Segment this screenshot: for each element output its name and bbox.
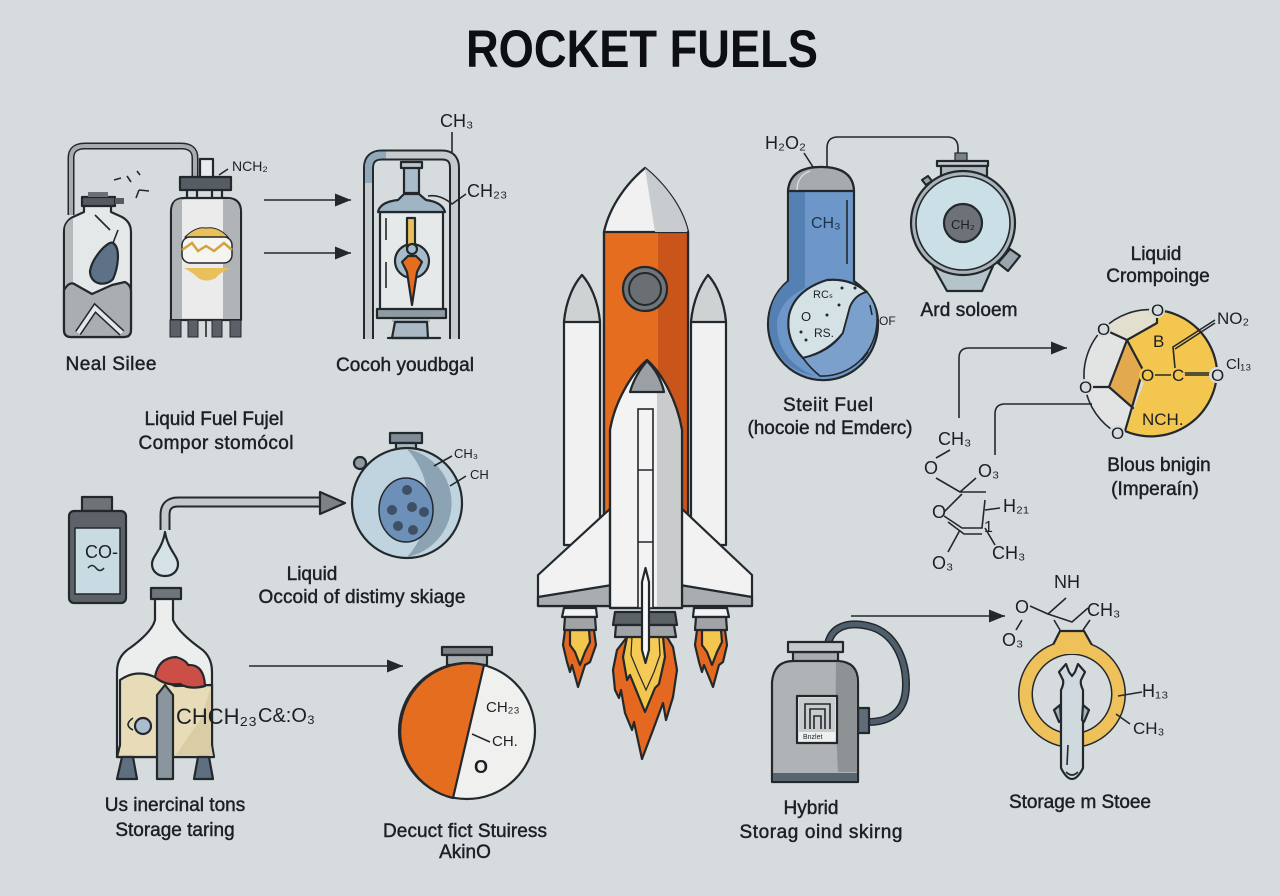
panel: solid fuel [748,133,958,439]
label: CH: CH [470,467,489,482]
label: molecule atoms [1079,301,1251,443]
icon: vessel [377,162,446,338]
icon: hybrid tank [772,624,906,782]
icon: pipe arrow [165,492,345,530]
heading: Decuct fict Stuiress: Decuct fict Stuiress [383,821,547,842]
panel: half sphere [383,647,547,863]
chemical formula: O₃ [932,553,953,573]
heading: Liquid Fuel Fujel [138,409,294,454]
heading: Liquid Crompoinge: Crompoinge [1106,266,1210,287]
label: molecule atoms: O [1211,366,1224,385]
rocket: center flame [613,637,677,759]
heading: Liquid Occoid: Liquid [287,564,337,585]
label: O: O [474,757,488,777]
label: molecule atoms: Cl₁₃ [1226,356,1251,373]
line [995,404,1092,455]
chemical formula [924,429,1029,573]
heading: Us inercinal tons: Storage taring [115,820,235,841]
chemical formula: O [924,458,938,478]
label: RS: RS. [814,326,834,340]
rocket: left wing [538,507,612,606]
icon: cylinder tank [170,159,241,337]
icon: bottle [117,588,214,779]
label: molecule atoms: O [1141,366,1154,385]
icon: pie circle [1077,302,1225,441]
label: CH3: CH₃ [1133,719,1164,738]
label: molecule atoms: NO₂ [1217,309,1249,328]
icon: connecting tube [71,146,195,215]
chemical formula: O₃ [1002,630,1023,650]
chemical formula: NH [1054,572,1080,592]
panel: liquid compound [959,244,1251,500]
label: molecule atoms: O [1079,378,1092,397]
icon: round tank [911,153,1020,291]
label: CH3: CH₃ [440,111,473,131]
heading: Us inercinal tons: Us inercinal tons [105,795,245,816]
callout line [428,194,466,204]
label: CH3: CH₃ [454,446,478,461]
title: ROCKET FUELS [466,20,818,79]
icon: blue flask [768,167,878,380]
heading: Neal Silee: Neal Silee [66,354,156,375]
heading: Blous bnigin: (Imperaín) [1111,479,1199,500]
heading: Steilt Fuel: Steiit Fuel [783,395,873,416]
rocket: right flame [695,630,727,687]
label: CH23: CH₂₃ [486,699,520,716]
label: molecule atoms: C [1172,366,1184,385]
heading: Decuct fict Stuiress [383,821,547,863]
heading: Blous bnigin [1107,455,1211,500]
panel: reactor vessel [336,111,507,376]
chemical formula: H₂₁ [1003,496,1029,516]
label: H13: H₁₃ [1142,681,1168,701]
arrow [851,615,1005,617]
heading: Hybrid: Storag oind skirng [740,822,902,843]
icon: spherical tank [352,433,462,558]
chemical formula: CH₃ [1087,600,1120,620]
arrow [264,252,351,254]
arrow [264,199,351,201]
label: molecule atoms: NCH. [1142,410,1184,429]
rocket: left flame [563,630,596,687]
heading: Ard soloem: Ard soloem [920,300,1018,321]
chemical formula: O [1015,597,1029,617]
label: molecule atoms: O [1111,424,1124,443]
label: molecule atoms: B [1153,332,1164,351]
icon: pipes [368,155,454,339]
label: tank plate: Bnzlet [803,734,823,741]
label: molecule atoms: O [1097,320,1110,339]
icon: half orange sphere [399,647,535,799]
heading: Liquid Crompoinge: Liquid [1131,244,1181,265]
heading: Hybrid: Hybrid [784,798,838,819]
chemical formula [1002,572,1120,650]
label: H2O2: H₂O₂ [765,133,806,153]
heading: Liquid Crompoinge [1106,244,1210,287]
panel: liquid storage [69,433,489,608]
label: CH23: CH₂₃ [467,181,507,201]
chemical formula: CH₃ [938,429,971,449]
panel: round tank [911,153,1020,321]
heading: Hybrid [740,798,902,843]
panel: neat silicone apparatus [64,146,268,375]
chemical formula: O₃ [978,461,999,481]
chemical formula: 1 [984,519,993,536]
rocket: shuttle body [610,360,682,608]
heading: Decuct fict Stuiress: AkinO [439,842,491,863]
icon: glass bottle [64,171,149,337]
heading: Blous bnigin: Blous bnigin [1107,455,1211,476]
label: O: O [801,309,811,324]
panel: storage ring [1002,572,1168,813]
chemical formula: O [932,502,946,522]
heading: Us inercinal tons [105,795,245,841]
heading: Liquid Fuel Fujel: Liquid Fuel Fujel [144,409,284,430]
heading: Cocoh youdbgal: Cocoh youdbgal [336,355,474,376]
arrow [249,665,403,667]
arrow [959,348,1067,418]
label: CH2: CH₂ [951,217,975,232]
label: NCH2: NCH₂ [232,158,268,174]
label: CH.: CH. [492,733,518,750]
rocket: nozzles [562,568,729,663]
label: molecule atoms: O [1151,301,1164,320]
rocket: right booster [691,275,726,545]
heading: Liquid Occoid: Occoid of distimy skiage [258,587,466,608]
label: C:O3: C&:O₃ [258,705,315,727]
label: CHCH23: CHCH₂₃ [176,704,257,729]
rocket: right wing [680,507,752,606]
label: RCs: RCₛ [813,289,833,301]
panel: hybrid storage [740,616,1005,843]
rocket [538,168,752,759]
label: OF: OF [879,314,896,328]
icon: yellow ring [1026,631,1118,779]
heading: Steilt Fuel: (hocoie nd Emderc) [748,418,912,439]
rocket: left booster [564,275,600,545]
chemical formula: CH₃ [992,543,1025,563]
heading: Steilt Fuel [748,395,912,439]
icon: droplet [152,532,178,576]
icon: jar: CO- [85,542,118,562]
panel: storage bottle [105,588,315,841]
heading: Liquid Fuel Fujel: Compor stomócol [138,433,294,454]
icon: jar [69,497,126,603]
heading: Liquid Occoid [258,564,466,608]
label: CH3: CH₃ [811,215,841,232]
heading: Storage m Stoee: Storage m Stoee [1009,792,1151,813]
rocket: central orange tank [604,168,688,520]
